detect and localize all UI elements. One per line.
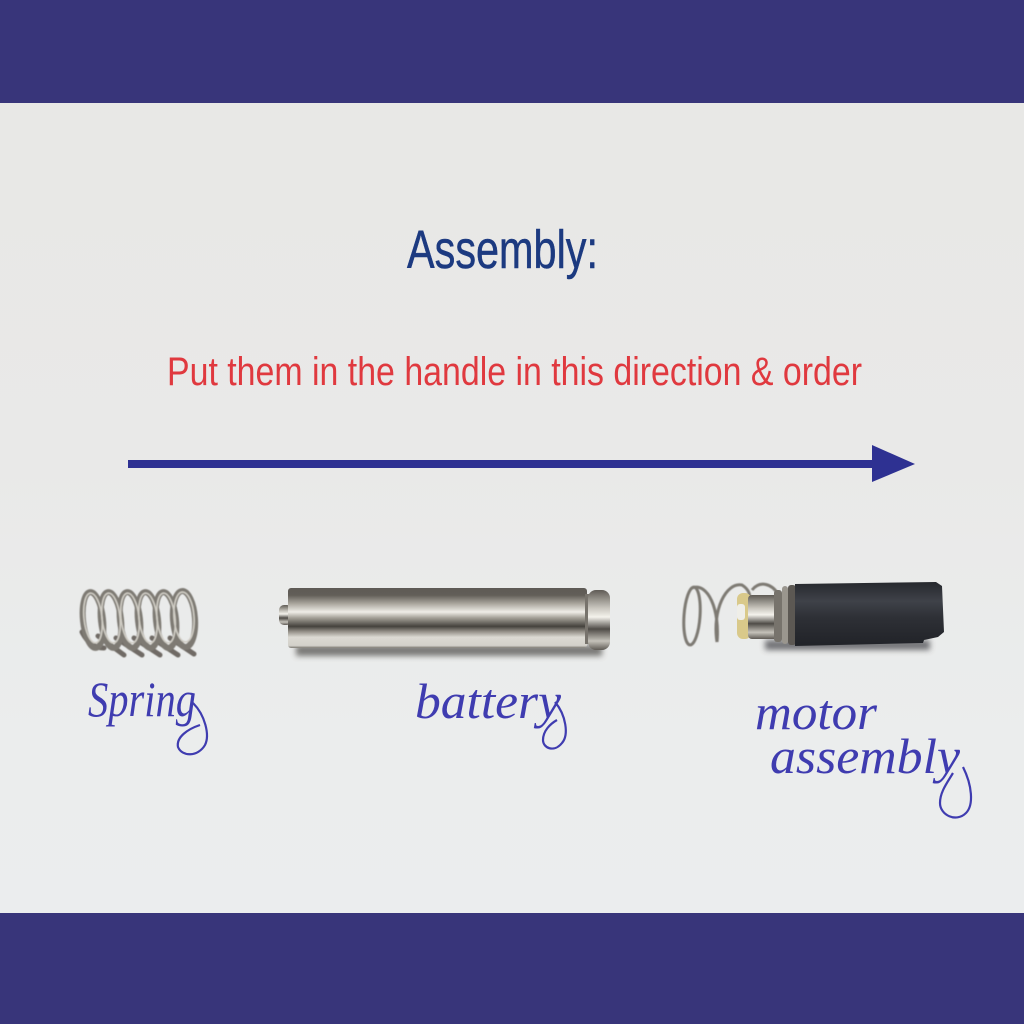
battery shadow xyxy=(296,645,602,656)
title: Assembly: xyxy=(407,220,598,280)
motor collar rings xyxy=(774,585,796,645)
label: spring xyxy=(88,671,207,754)
battery body xyxy=(288,588,587,648)
bottom band xyxy=(0,913,1024,1024)
label: battery: battery xyxy=(415,673,562,729)
component: battery xyxy=(279,588,610,656)
instruction text: Put them in the handle in this direction & order xyxy=(167,350,862,394)
spring front coils xyxy=(80,590,197,649)
motor shadow xyxy=(765,640,930,650)
top band xyxy=(0,0,1024,103)
motor white face xyxy=(737,604,745,620)
spring label tail xyxy=(178,703,207,754)
battery label tail xyxy=(543,702,566,749)
battery nub xyxy=(279,605,292,625)
label: battery xyxy=(415,673,566,749)
spring back coils xyxy=(82,632,194,655)
label: motor assembly: motor xyxy=(755,684,878,740)
battery cap xyxy=(588,590,610,650)
label: motor assembly xyxy=(755,684,971,818)
assembly label tail xyxy=(940,767,971,818)
label: spring: Spring xyxy=(88,671,196,727)
motor rubber sleeve xyxy=(795,582,944,646)
motor metal housing xyxy=(748,595,778,639)
motor spring xyxy=(682,584,778,645)
component: spring xyxy=(80,590,197,655)
arrow: insertion direction xyxy=(128,445,915,482)
motor yellow contact xyxy=(737,593,751,639)
spring highlights xyxy=(81,591,196,644)
label: motor assembly: assembly xyxy=(770,728,961,784)
component: motor assembly xyxy=(682,582,944,650)
battery neck xyxy=(585,594,591,644)
